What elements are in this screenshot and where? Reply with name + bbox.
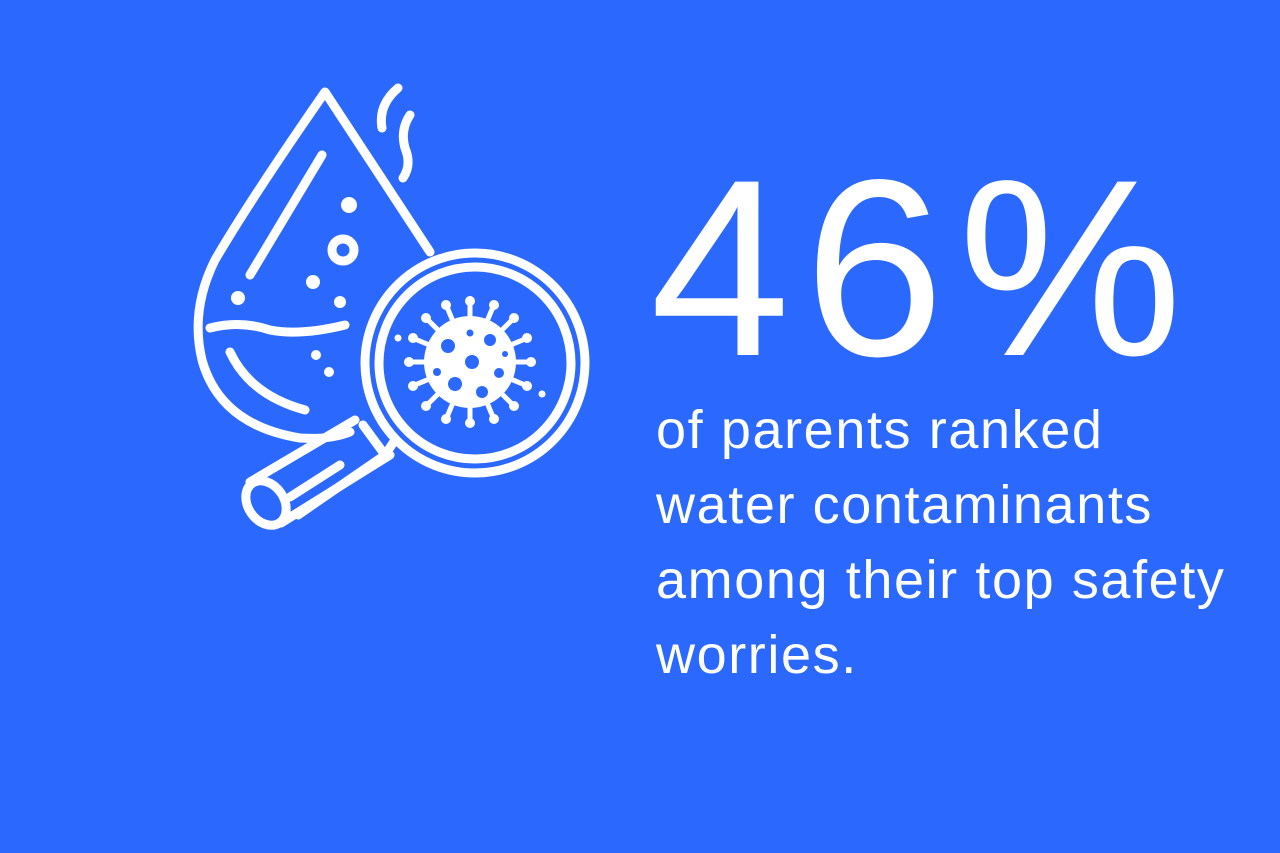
handle — [298, 425, 395, 515]
water wave — [210, 324, 345, 332]
description text: water contaminants — [656, 475, 1153, 535]
steam lines — [381, 88, 398, 128]
description text: of parents ranked — [656, 400, 1103, 460]
drop outline — [198, 92, 430, 438]
description text: among their top safety — [656, 550, 1226, 610]
lower highlight — [230, 352, 305, 410]
virus — [424, 316, 516, 408]
icon: water drop with magnifying glass and virus — [194, 84, 590, 530]
description text — [656, 400, 1226, 685]
bubble ring — [332, 239, 354, 261]
description text: worries. — [656, 625, 858, 685]
highlight line — [250, 155, 322, 275]
magnifier lens — [365, 253, 585, 473]
headline stat: 46% — [650, 128, 1196, 409]
bubbles — [341, 197, 357, 213]
